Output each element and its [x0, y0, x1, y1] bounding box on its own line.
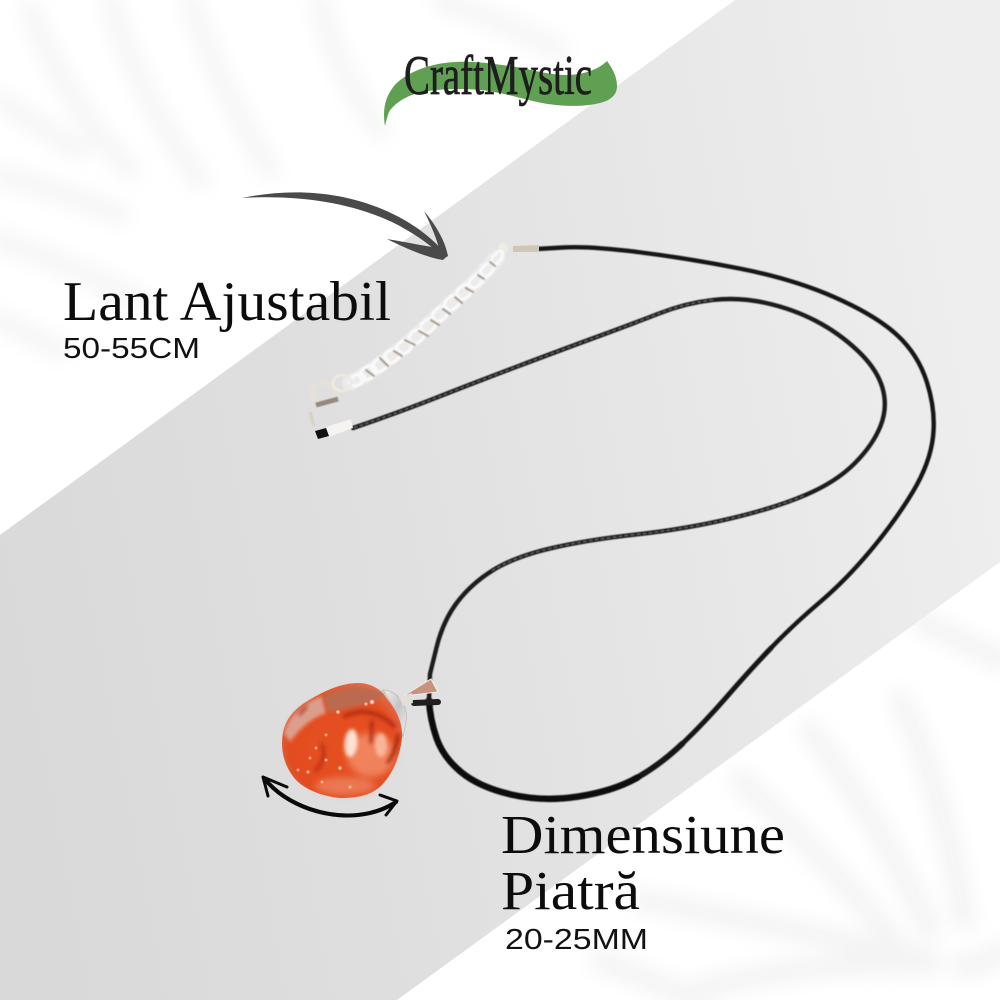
- gemstone pendant: [282, 679, 438, 798]
- bail: [383, 679, 438, 737]
- heading: Dimensiune Piatră: Piatră: [501, 860, 640, 921]
- necklace: [310, 243, 934, 799]
- stone pale right glow: [315, 733, 395, 795]
- lobster clasp: [310, 375, 351, 426]
- stone pale left shell: [284, 696, 326, 742]
- logo: CraftMystic: [384, 45, 617, 126]
- logo wordmark: CraftMystic: [404, 45, 592, 107]
- double-headed arrow: stone size: [263, 777, 397, 815]
- heading: Dimensiune Piatră: Dimensiune: [501, 804, 785, 865]
- stone body: [282, 683, 402, 798]
- palm shadow: bottom right: [600, 620, 1000, 1000]
- arrow: pointing to chain: [242, 192, 448, 260]
- stone highlights: [343, 728, 387, 758]
- palm shadow: top left: [0, 0, 560, 350]
- stone dark upper dome: [323, 688, 384, 712]
- heading: Lant Ajustabil: Lant Ajustabil: [63, 271, 391, 333]
- logo green swoosh: [384, 61, 617, 126]
- chain extender: [348, 249, 505, 388]
- label: 20-25MM: 20-25MM: [505, 924, 648, 956]
- end cap: [326, 419, 353, 437]
- label: 50-55CM: 50-55CM: [63, 333, 200, 365]
- cord: [353, 247, 934, 799]
- stone deep red streaks: [300, 707, 398, 770]
- silver crimp top: [513, 245, 539, 252]
- stone sparkles: [297, 700, 374, 788]
- heading: Dimensiune Piatră: [501, 804, 785, 921]
